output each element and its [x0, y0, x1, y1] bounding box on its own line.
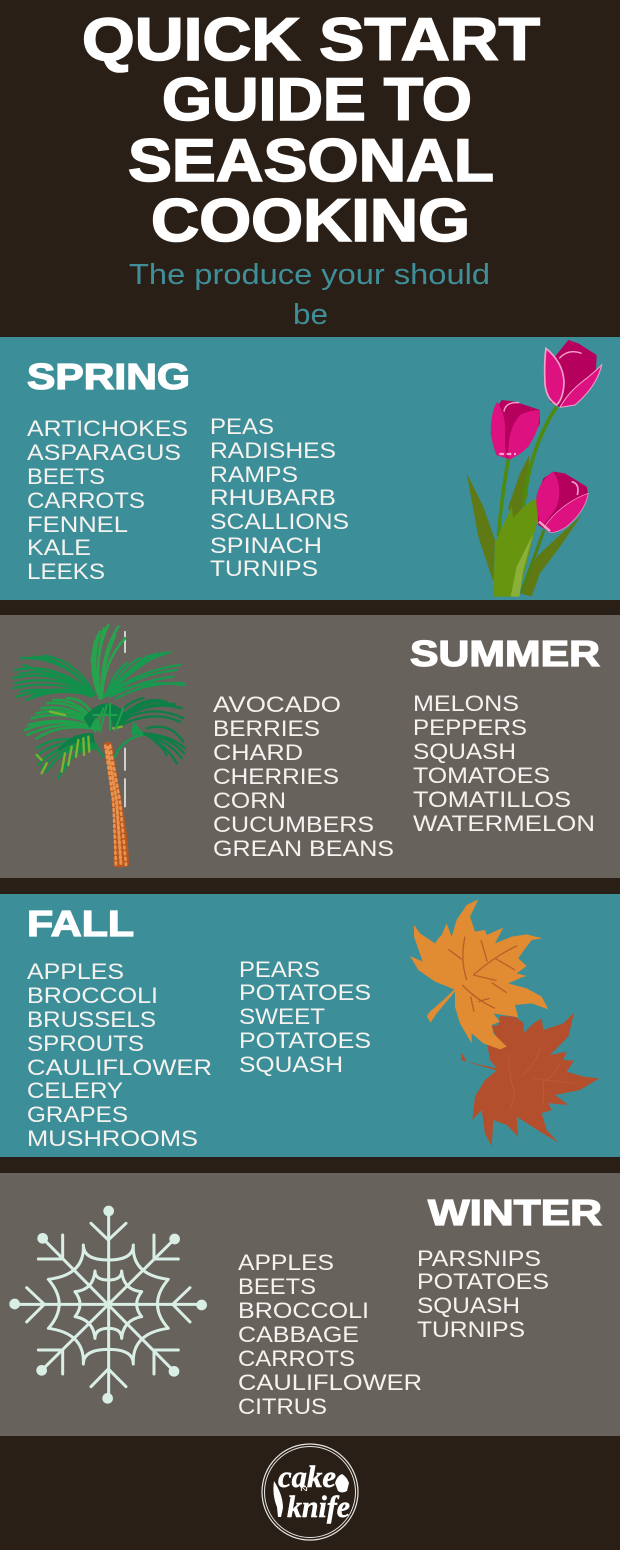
- list: spring column 1: CARROTS: [27, 488, 145, 513]
- list: winter column 2: SQUASH: [417, 1293, 520, 1318]
- list: spring column 1: KALE: [27, 535, 91, 560]
- list: fall column 1: CELERY: [27, 1078, 123, 1103]
- list: winter column 2: [417, 1246, 549, 1342]
- list: summer column 2: WATERMELON: [413, 811, 595, 836]
- icon: knife: [273, 1481, 283, 1517]
- icon: palm tree: [13, 625, 185, 868]
- list: summer column 1: CHARD: [213, 740, 303, 765]
- panel: summer: [0, 615, 620, 878]
- red leaf: [461, 1013, 599, 1147]
- list: fall column 2: PEARS: [239, 957, 320, 982]
- list: winter column 2: PARSNIPS: [417, 1246, 541, 1271]
- list: summer column 1: GREAN BEANS: [213, 836, 394, 861]
- icon: snowflake: [9, 1206, 207, 1404]
- list: fall column 1: GRAPES: [27, 1102, 128, 1127]
- list: spring column 2: RADISHES: [210, 438, 336, 463]
- list: summer column 2: [413, 691, 595, 836]
- list: winter column 1: BEETS: [238, 1274, 316, 1299]
- list: summer column 2: MELONS: [413, 691, 519, 716]
- subtitle: be: [293, 299, 328, 331]
- list: fall column 2: POTATOES: [239, 1028, 371, 1053]
- list: summer column 1: CORN: [213, 788, 286, 813]
- list: winter column 1: CABBAGE: [238, 1322, 359, 1347]
- subtitle: [129, 259, 490, 331]
- list: summer column 2: TOMATILLOS: [413, 787, 571, 812]
- list: spring column 1: [27, 416, 188, 584]
- list: fall column 1: APPLES: [27, 959, 124, 984]
- panel: fall: [0, 894, 620, 1157]
- list: winter column 2: POTATOES: [417, 1269, 549, 1294]
- list: winter column 1: CAULIFLOWER: [238, 1370, 422, 1395]
- list: winter column 1: APPLES: [238, 1250, 334, 1275]
- heading: summer: SUMMER: [410, 633, 600, 674]
- list: fall column 1: BROCCOLI: [27, 983, 158, 1008]
- list: fall column 1: MUSHROOMS: [27, 1126, 198, 1151]
- middle tulip: [491, 400, 540, 459]
- orange leaf: [410, 899, 548, 1049]
- list: fall column 1: BRUSSELS: [27, 1007, 156, 1032]
- list: spring column 2: TURNIPS: [210, 556, 318, 581]
- list: summer column 2: PEPPERS: [413, 715, 527, 740]
- list: spring column 2: SPINACH: [210, 533, 322, 558]
- icon: autumn leaves: [410, 899, 599, 1147]
- heading: spring: SPRING: [27, 356, 190, 397]
- title: COOKING: [151, 187, 470, 254]
- list: summer column 1: CHERRIES: [213, 764, 339, 789]
- list: fall column 2: SQUASH: [239, 1052, 343, 1077]
- list: fall column 2: POTATOES: [239, 980, 371, 1005]
- list: summer column 2: TOMATOES: [413, 763, 550, 788]
- list: summer column 2: SQUASH: [413, 739, 516, 764]
- top tulip: [545, 340, 602, 407]
- logo: cake n knife: N: [300, 1487, 309, 1493]
- list: spring column 2: SCALLIONS: [210, 509, 349, 534]
- panel: winter: [0, 1173, 620, 1436]
- list: winter column 1: CARROTS: [238, 1346, 355, 1371]
- list: winter column 1: BROCCOLI: [238, 1298, 369, 1323]
- bottom tulip: [536, 472, 588, 532]
- title: [82, 6, 540, 254]
- list: spring column 1: ASPARAGUS: [27, 440, 181, 465]
- list: winter column 1: CITRUS: [238, 1394, 327, 1419]
- logo: cake n knife: knife: [287, 1489, 350, 1524]
- list: winter column 1: [238, 1250, 422, 1419]
- list: fall column 1: [27, 959, 212, 1151]
- list: spring column 2: [210, 414, 349, 581]
- list: spring column 2: RAMPS: [210, 462, 298, 487]
- list: fall column 2: [239, 957, 371, 1077]
- panel: spring: [0, 337, 620, 600]
- list: spring column 1: LEEKS: [27, 559, 105, 584]
- list: summer column 1: AVOCADO: [213, 692, 341, 717]
- icon: cupcake: [335, 1474, 349, 1492]
- list: spring column 2: PEAS: [210, 414, 274, 439]
- list: spring column 1: BEETS: [27, 464, 105, 489]
- title: GUIDE TO: [162, 66, 472, 133]
- heading: fall: FALL: [27, 903, 134, 944]
- logo: cake n knife: cake: [278, 1459, 336, 1494]
- title: SEASONAL: [128, 127, 494, 194]
- title: QUICK START: [82, 6, 540, 73]
- list: fall column 2: SWEET: [239, 1004, 325, 1029]
- heading: winter: WINTER: [428, 1192, 602, 1233]
- list: summer column 1: [213, 692, 394, 861]
- list: fall column 1: SPROUTS: [27, 1031, 144, 1056]
- list: spring column 1: ARTICHOKES: [27, 416, 188, 441]
- list: fall column 1: CAULIFLOWER: [27, 1055, 212, 1080]
- logo: cake n knife: [262, 1444, 358, 1540]
- subtitle: The produce your should: [129, 259, 490, 291]
- icon: tulips: [467, 340, 602, 597]
- list: spring column 2: RHUBARB: [210, 485, 336, 510]
- list: winter column 2: TURNIPS: [417, 1317, 525, 1342]
- list: spring column 1: FENNEL: [27, 512, 128, 537]
- list: summer column 1: CUCUMBERS: [213, 812, 374, 837]
- list: summer column 1: BERRIES: [213, 716, 320, 741]
